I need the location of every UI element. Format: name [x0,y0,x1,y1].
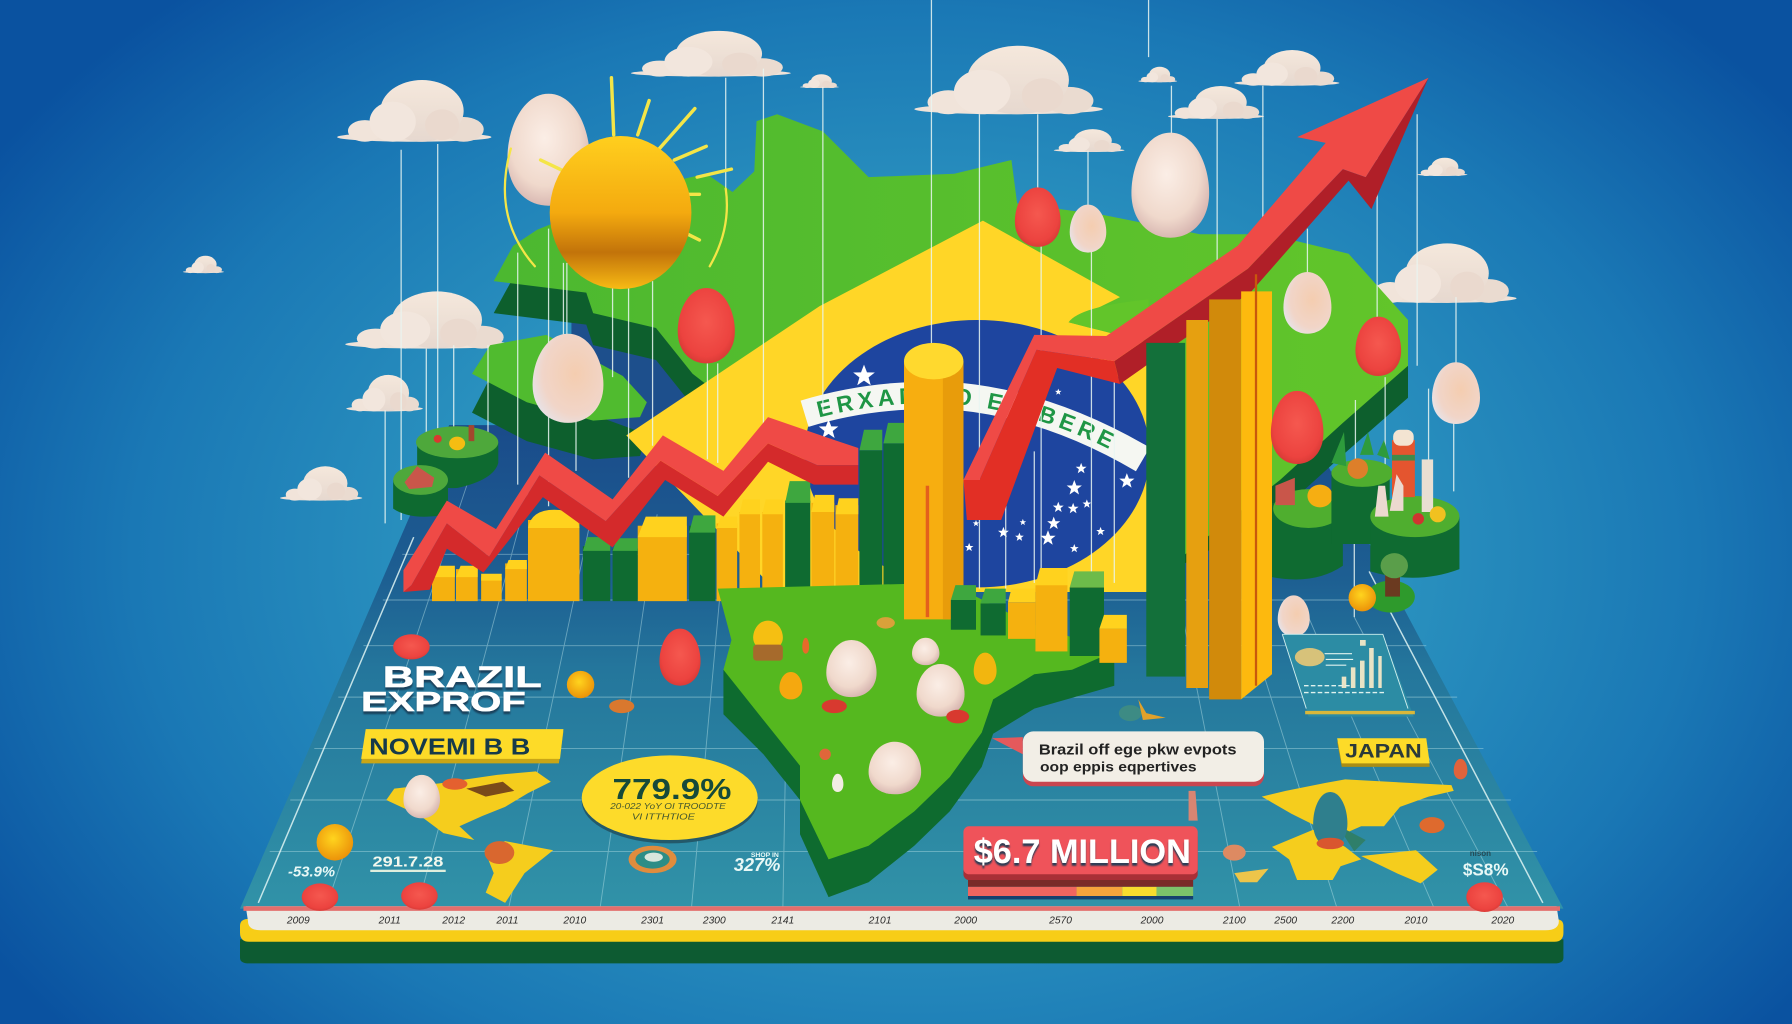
navy gap behind map [571,309,731,457]
stat bubble: 779.9% [582,755,758,843]
timeline year labels: 2010 [562,915,587,926]
timeline rail [240,906,1563,963]
timeline year labels: 2570 [1048,915,1072,926]
clouds [183,31,1517,501]
ring icon [629,846,677,873]
timeline year labels: 2009 [286,915,310,926]
stat: -53.9%: -53.9% [288,865,335,881]
red trend arrow, top surface [963,78,1429,480]
shell [1419,817,1445,833]
title: BRAZIL EXPROF: BRAZIL [383,661,542,694]
cream egg on board [1278,595,1310,637]
red trend arrow, left part [403,417,858,592]
island: left upper [416,425,498,488]
sun [550,136,691,289]
stat: $68%: nison [1470,849,1491,858]
timeline year labels: 2301 [640,915,664,926]
eggs on terrain [753,617,997,794]
timeline year labels: 2000 [1140,915,1164,926]
timeline year labels: 2200 [1330,915,1355,926]
orange ball [317,824,353,861]
red trend arrow, right part [963,78,1429,520]
flag blue globe [805,320,1150,587]
flag stars [819,365,1134,552]
timeline year labels: 2101 [868,915,891,926]
stat: date: 291.7.28 [373,854,443,870]
red flame [1454,759,1467,779]
stat bubble: 779.9%: 779.9% [613,774,731,806]
stat bubble: 779.9%: 20-022 YoY OI TROODTE [609,801,726,811]
title: BRAZIL EXPROF [361,661,542,717]
island: small tree [1349,553,1415,613]
island: left lower [393,465,448,517]
green South America terrain, surface [718,583,1114,859]
egg group behind chart [507,94,1480,424]
date label: November: NOVEMI B B [369,733,530,759]
green South America terrain, side [723,640,1114,897]
timeline year labels: 2010 [1404,915,1428,926]
foreground red egg [1271,391,1323,464]
map of Brazil, side wall [472,224,1408,583]
sun rays [505,78,731,266]
timeline year labels: 2500 [1273,915,1297,926]
bar chart: central tall bars [859,423,905,594]
bar chart: left small bars [432,481,858,601]
callout: Brazil off ege pkw evpots [1039,742,1237,758]
stat bubble: 779.9%: VI ITTHTIOE [632,811,695,821]
stat: 327%: 327% [734,854,780,875]
timeline year labels: 2141 [770,915,794,926]
cylinder bar [904,343,963,619]
board [240,425,1563,909]
map: Americas [386,771,553,903]
island: right with towers [1370,430,1459,578]
stat: 327%: SHOP IN [751,852,779,859]
shell [609,699,634,713]
timeline year labels: 2100 [1222,915,1246,926]
JAPAN label: JAPAN [1345,741,1422,763]
timeline year labels: 2011 [378,915,401,926]
stat: $68% [1463,849,1509,879]
stat: $68%: $S8% [1463,859,1509,879]
board grid lines [270,480,1537,909]
callout [992,731,1264,786]
value tag: $6.7 MILLION [963,826,1198,880]
flag green patch [1069,299,1149,338]
callout: oop eppis eqpertives [1040,759,1197,774]
small shrimp [1223,845,1269,882]
timeline year labels: 2300 [702,915,726,926]
colour strip [968,880,1193,899]
bar chart: right tall bars [1146,274,1272,699]
flag yellow diamond [626,221,1149,592]
timeline year labels: 2011 [495,915,518,926]
timeline year labels [286,915,1515,926]
map: Eurasia and Africa [1262,779,1454,883]
title: BRAZIL EXPROF: EXPROF [361,686,526,717]
island: right left [1272,478,1344,579]
map of Brazil, green surface [494,114,1408,583]
hanging strings [385,0,1456,617]
pin [1189,791,1198,821]
shell and crest [1119,699,1166,721]
yellow ball [567,671,594,698]
timeline markers [302,882,1503,912]
timeline year labels: 2012 [441,915,465,926]
date label: November [361,729,563,763]
timeline year labels: 2020 [1490,915,1515,926]
value tag: $6.7 MILLION: $6.7 MILLION [974,833,1191,871]
stat: date [370,854,446,872]
bar chart: foreground small bars [951,568,1127,663]
island: right middle [1331,432,1393,544]
red egg [659,629,701,686]
red pebble [393,634,430,659]
timeline year labels: 2000 [953,915,977,926]
mini chart panel [1282,634,1415,717]
flag banner: ERXAD O E BERE [816,388,1114,449]
map, lower left region [472,335,647,421]
JAPAN label [1337,738,1430,767]
board edge highlight [258,537,1543,903]
